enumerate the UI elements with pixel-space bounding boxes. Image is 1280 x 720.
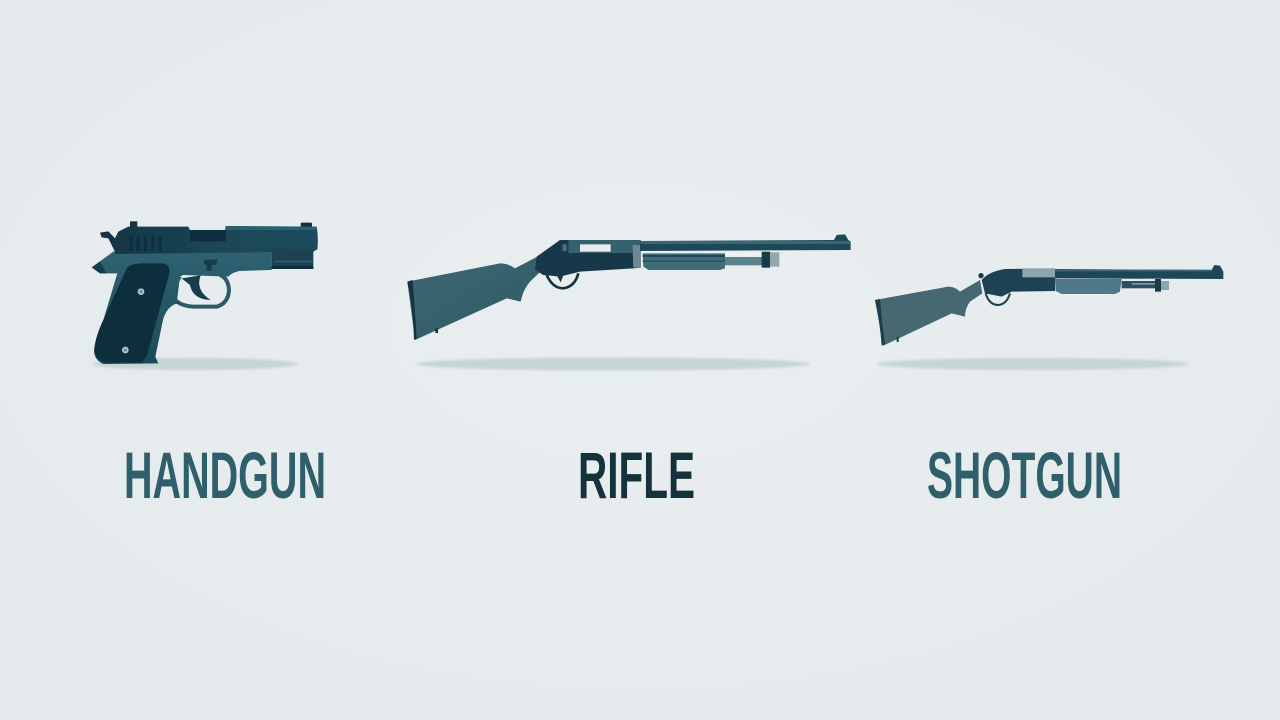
handgun ground shadow (92, 358, 298, 370)
label: handgun: HANDGUN (124, 438, 326, 512)
panel: shotgun (875, 265, 1223, 370)
rifle ground shadow (416, 358, 810, 370)
icon: handgun (92, 221, 318, 364)
panel: rifle (407, 234, 851, 370)
label: rifle: RIFLE (578, 438, 695, 512)
label: shotgun: SHOTGUN (927, 438, 1122, 512)
icon: shotgun (875, 265, 1223, 346)
shotgun ground shadow (877, 358, 1189, 370)
icon: rifle (407, 234, 851, 340)
panel: handgun (92, 221, 318, 370)
